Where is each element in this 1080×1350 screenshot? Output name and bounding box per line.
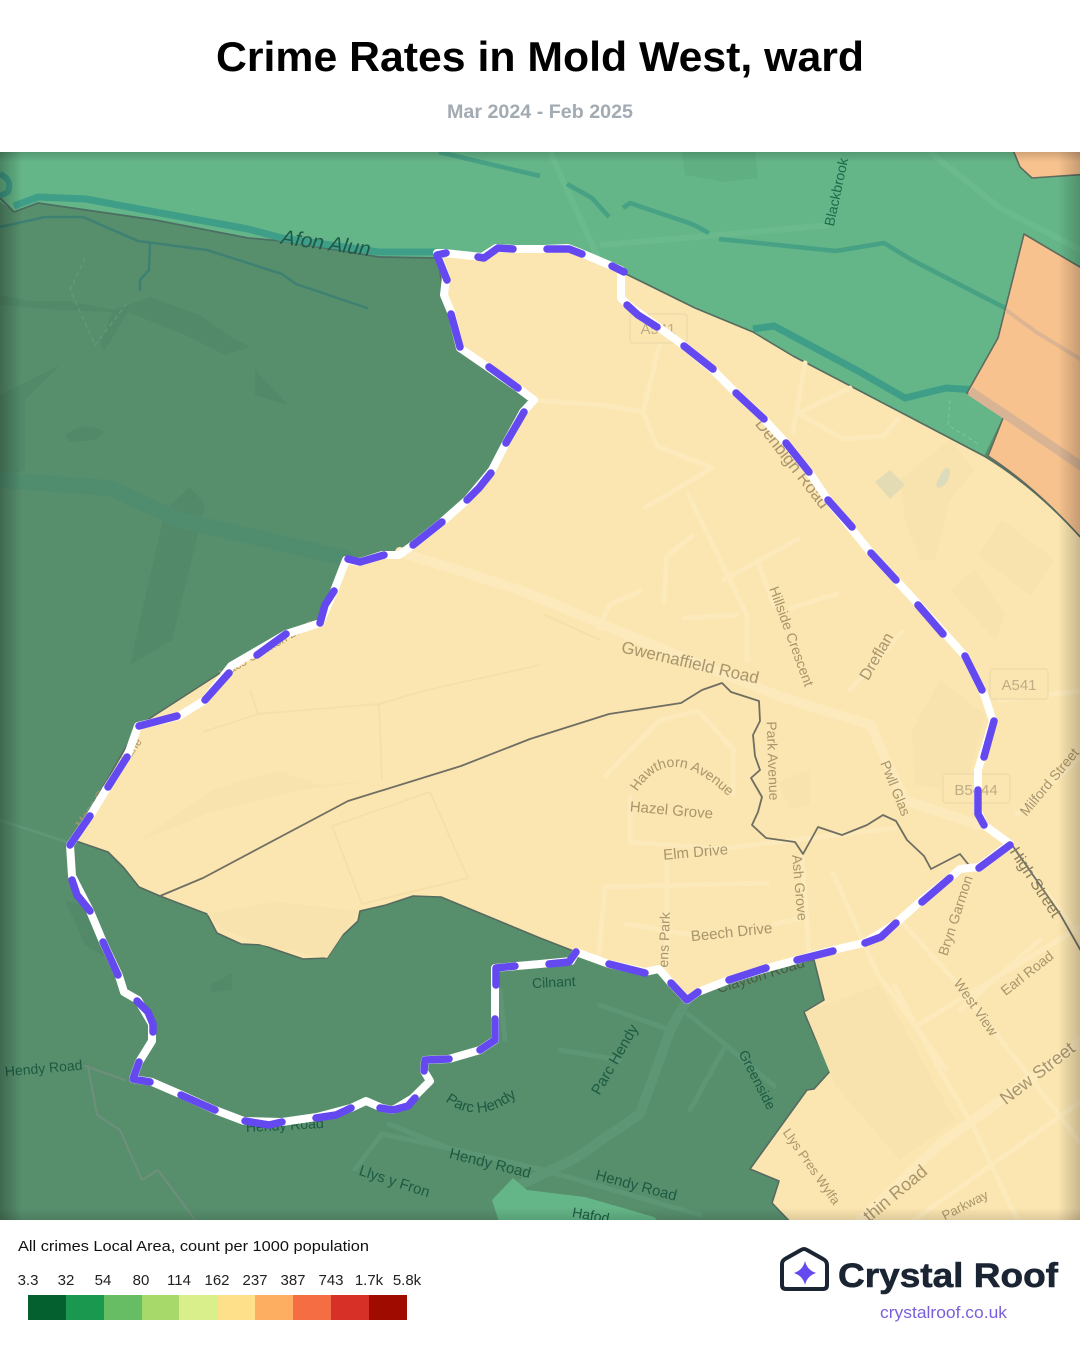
street name labels: ens Park [655,911,673,968]
street name labels: Beech Drive [690,920,773,945]
street name labels: Llys y Fron [357,1162,432,1201]
legend [18,1238,422,1320]
river boundary line [0,198,437,258]
street name labels: Earl Road [997,948,1056,999]
street name labels: Greenside [736,1047,779,1112]
street name labels: Llys Pres Wylfa [780,1125,844,1208]
icon: house with star [782,1249,827,1289]
region: light green river valley [0,152,1080,456]
legend colour bar [28,1295,407,1320]
street name labels: Maes Garmon Lane [73,735,145,830]
legend scale labels: 5.8k [393,1272,422,1289]
street name labels: Maes Garmon Lane [217,616,316,681]
light green patch at bottom [492,1178,657,1220]
legend scale labels: 743 [318,1272,344,1289]
street name labels: Hendy Road [594,1167,679,1205]
legend scale labels: 114 [167,1272,191,1289]
river channels [0,152,1080,445]
legend scale labels [18,1272,422,1289]
legend scale labels: 237 [242,1272,268,1289]
street name labels: Hazel Grove [629,798,714,823]
ward outline: purple dashes [70,248,1010,1125]
street name labels: West View [951,976,1002,1039]
legend title: All crimes Local Area, count per 1000 population [18,1238,369,1255]
legend scale labels: 3.3 [18,1272,38,1289]
legend scale labels: 32 [58,1272,74,1289]
logo: Crystal Roof [782,1249,1059,1322]
street name labels: Bryn Garmon [935,873,976,958]
street name labels: High Street [1006,844,1064,921]
street name labels: Gwernaffield Road [620,638,761,688]
street name labels: Hendy Road [245,1115,324,1135]
map panel: B5444 [954,782,998,799]
inner ward boundary lines [160,683,1080,958]
street name labels: Afon Alun [278,226,372,261]
street name labels: Pwll Glas [877,758,914,818]
town buildings and parks [207,914,833,1072]
street name labels: Hawthorn Avenue [630,759,732,795]
map panel: A541 [640,321,676,338]
wordmark: Crystal Roof [838,1257,1059,1295]
street name labels: Cilnant [532,973,576,991]
street name labels: Parc Hendy [446,1090,515,1113]
subtitle: date range: Mar 2024 - Feb 2025 [447,102,633,123]
legend scale labels: 1.7k [355,1272,384,1289]
legend scale labels: 54 [95,1272,111,1289]
street name labels: Hafod [571,1204,611,1226]
website url: crystalroof.co.uk [880,1304,1008,1322]
street name labels: New Street [996,1038,1079,1109]
street name labels: Hendy Road [4,1057,83,1079]
road shields [630,314,1048,803]
road network in ward [400,343,1080,1230]
region: dark green low crime area [0,202,1012,1220]
street name labels: Parkway [939,1187,991,1223]
street name labels: Hillside Crescent [766,584,817,688]
map edge vignette [0,152,1080,1220]
street name labels: Hendy Road [448,1145,533,1182]
street name labels: Clayton Road [715,954,807,997]
map panel [0,152,1080,1220]
street name labels: Denbigh Road [751,415,833,512]
region: orange higher crime [967,150,1080,548]
street name labels: Blackbrook [821,155,851,227]
legend scale labels: 162 [204,1272,230,1289]
ward outline: white base [70,248,1010,1122]
street name labels: Ash Grove [789,854,811,921]
region: cream ward and town centre [70,248,1080,1230]
street name labels: Elm Drive [662,841,729,864]
dark woodland patches [0,295,288,992]
title: Crime Rates in Mold West, ward [216,33,864,80]
street name labels: thin Road [859,1161,931,1226]
street name labels: Parc Hendy [588,1021,642,1098]
legend scale labels: 80 [133,1272,149,1289]
legend scale labels: 387 [280,1272,306,1289]
street name labels: Park Avenue [764,721,782,801]
map panel: A541 [1001,677,1037,694]
street name labels: Dreflan [857,630,897,683]
